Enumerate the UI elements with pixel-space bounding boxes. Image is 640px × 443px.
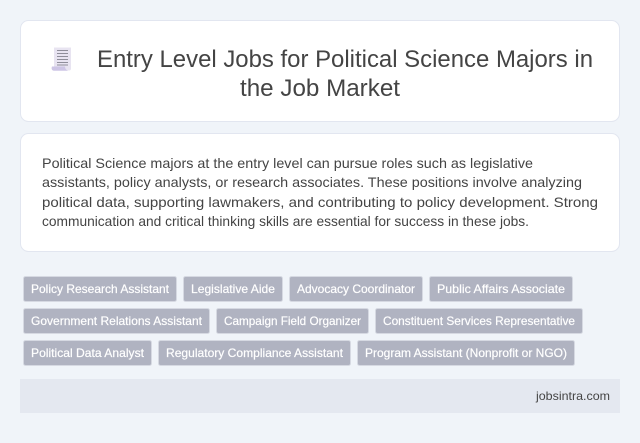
text block: description: assistants, policy analysts, or research associates. These positions involve analyzing bbox=[42, 174, 582, 190]
panel: description bbox=[20, 134, 620, 252]
text block: description: communication and critical thinking skills are essential for success in these jobs. bbox=[42, 213, 529, 229]
tag: Public Affairs Associate: Public Affairs Associate bbox=[437, 282, 565, 296]
tag: Constituent Services Representative: Constituent Services Representative bbox=[383, 314, 575, 328]
tag: Political Data Analyst: Political Data Analyst bbox=[31, 346, 145, 360]
panel: header card bbox=[20, 20, 620, 122]
tag: Advocacy Coordinator: Advocacy Coordinator bbox=[297, 282, 415, 296]
tag: Program Assistant (Nonprofit or NGO) bbox=[358, 340, 574, 366]
tag: Policy Research Assistant: Policy Research Assistant bbox=[31, 282, 170, 296]
tag: Public Affairs Associate bbox=[430, 276, 572, 302]
text block: description: political data, supporting lawmakers, and contributing to policy development. Strong bbox=[42, 194, 598, 210]
tag: Legislative Aide bbox=[184, 276, 282, 302]
tag: Political Data Analyst bbox=[24, 340, 152, 366]
tag: Constituent Services Representative bbox=[376, 308, 582, 334]
tag: Government Relations Assistant: Government Relations Assistant bbox=[31, 314, 203, 328]
title bbox=[97, 46, 593, 102]
tag: Regulatory Compliance Assistant: Regulatory Compliance Assistant bbox=[166, 346, 344, 360]
tag: Campaign Field Organizer bbox=[216, 308, 368, 334]
tag: Program Assistant (Nonprofit or NGO): Program Assistant (Nonprofit or NGO) bbox=[365, 346, 567, 360]
tag: Government Relations Assistant bbox=[24, 308, 210, 334]
title: the Job Market bbox=[240, 75, 400, 102]
tag: Policy Research Assistant bbox=[24, 276, 176, 302]
tag: Campaign Field Organizer: Campaign Field Organizer bbox=[224, 314, 361, 328]
tag group: job titles bbox=[24, 276, 582, 366]
title: Entry Level Jobs for Political Science Majors in bbox=[97, 46, 593, 73]
footer bar bbox=[20, 379, 620, 413]
tag: Regulatory Compliance Assistant bbox=[158, 340, 350, 366]
text block: description bbox=[42, 155, 598, 229]
text block: description: Political Science majors at the entry level can pursue roles such as legislative bbox=[42, 155, 533, 171]
icon: document scroll bbox=[52, 48, 71, 71]
tag: Advocacy Coordinator bbox=[290, 276, 422, 302]
footer source text: jobsintra.com bbox=[535, 389, 610, 403]
tag: Legislative Aide: Legislative Aide bbox=[191, 282, 275, 296]
